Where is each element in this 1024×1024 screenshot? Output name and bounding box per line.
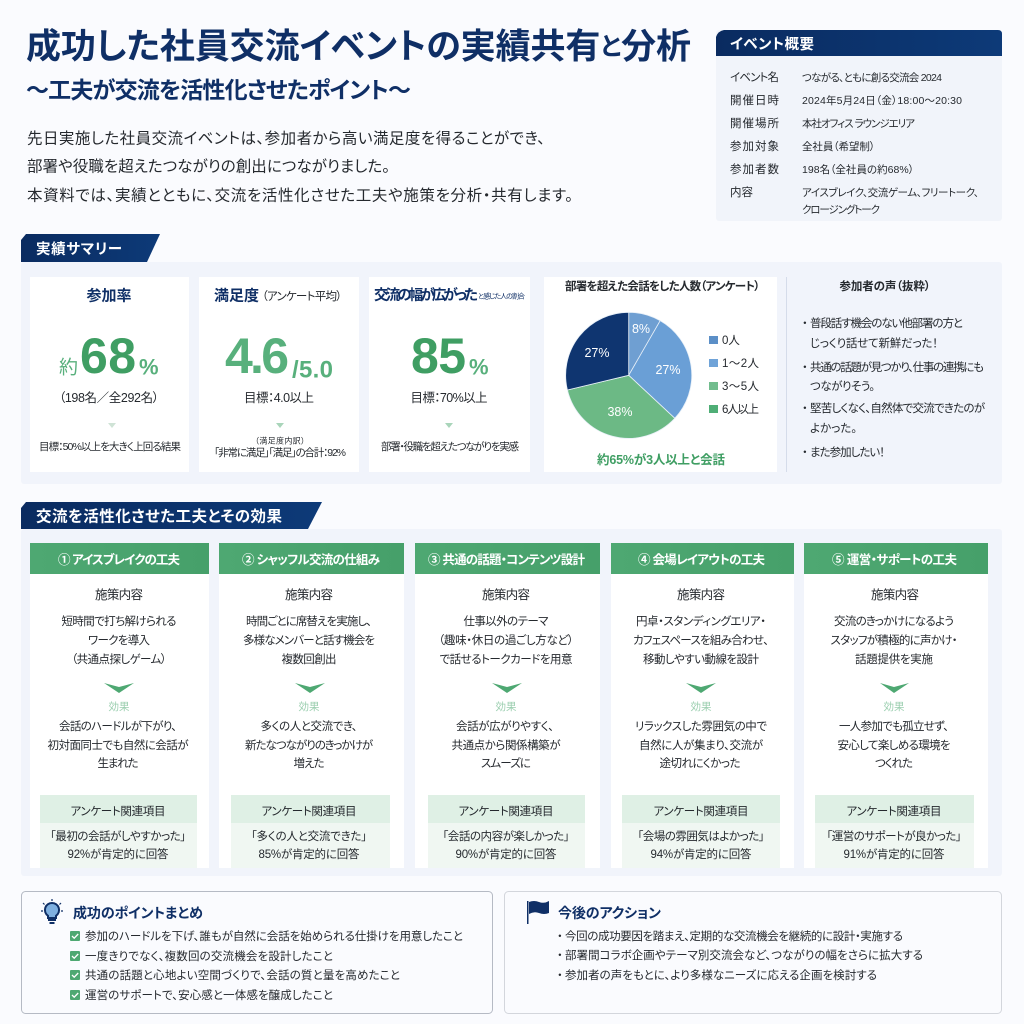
legend: 1〜2人 <box>722 357 760 370</box>
participant voices: 普段話す機会のない他部署の方と <box>810 316 963 330</box>
participant voices: 参加者の声（抜粋） <box>840 279 930 293</box>
card 5: operations and support: 91%が肯定的に回答 <box>844 847 945 861</box>
overview rows: イベント名 <box>730 70 779 84</box>
chart card: cross-department conversations <box>544 277 777 472</box>
card: satisfaction: 「非常に満足」「満足」の合計：92% <box>214 446 346 459</box>
pie labels: 8% <box>632 322 650 336</box>
card 4: venue layout: 自然に人が集まり、交流が <box>639 738 764 752</box>
overview rows: 開催場所 <box>730 116 780 130</box>
panel: event overview <box>716 30 1002 221</box>
card: participation rate: 参加率 <box>86 286 132 304</box>
card 5: operations and support: 話題提供を実施 <box>855 652 934 666</box>
panel: success points <box>22 892 492 1014</box>
overview rows: クロージングトーク <box>802 203 880 216</box>
pie labels: 38% <box>607 405 633 419</box>
pie labels: 27% <box>584 346 610 360</box>
card 1: ice break: 92%が肯定的に回答 <box>68 847 169 861</box>
participant voices: じっくり話せて新鮮だった！ <box>810 336 938 350</box>
card: participation rate: 約 <box>59 356 78 378</box>
legend <box>709 334 760 416</box>
card 5: operations and support: ⑤ 運営・サポートの工夫 <box>832 552 957 567</box>
card: breadth of exchange: と感じた人の割合 <box>478 291 525 300</box>
chart title: 部署を超えた会話をした人数（アンケート） <box>565 279 760 293</box>
pie labels: 27% <box>655 363 681 377</box>
card 2: shuffle: 複数回創出 <box>282 653 336 666</box>
overview rows: 参加対象 <box>730 140 780 153</box>
intro text: 本資料では、実績とともに、交流を活性化させた工夫や施策を分析・共有します。 <box>27 186 573 204</box>
section heading: 実績サマリー <box>36 240 122 258</box>
card 5: operations and support: 施策内容 <box>871 587 919 602</box>
pie labels <box>584 322 681 419</box>
card: satisfaction: 4.6 <box>225 328 289 384</box>
card 3: topics and content: で話せるトークカードを用意 <box>439 653 573 666</box>
pie chart <box>566 312 692 438</box>
card: satisfaction <box>199 277 359 472</box>
card 1: ice break: 施策内容 <box>95 587 143 602</box>
heading: 今後のアクション <box>558 905 662 921</box>
action list: ・ <box>557 931 563 943</box>
card 2: shuffle: 「多くの人と交流できた」 <box>251 829 367 843</box>
card 4: venue layout: 途切れにくかった <box>660 757 740 770</box>
checklist: 参加のハードルを下げ、誰もが自然に会話を始められる仕掛けを用意したこと <box>85 929 463 943</box>
card 1: ice break: 初対面同士でも自然に会話が <box>48 738 189 752</box>
card 2: shuffle: ② シャッフル交流の仕組み <box>242 552 380 567</box>
card 2: shuffle: 時間ごとに席替えを実施し、 <box>246 614 372 628</box>
participant voices <box>802 279 986 459</box>
intro text: 先日実施した社員交流イベントは、参加者から高い満足度を得ることができ、 <box>27 129 545 147</box>
overview rows: 参加者数 <box>730 163 780 176</box>
checklist <box>70 929 463 1002</box>
card 4: venue layout: 効果 <box>690 701 712 713</box>
participant voices: ・ <box>802 403 808 415</box>
card 2: shuffle <box>219 543 404 868</box>
overview rows: アイスブレイク、交流ゲーム、フリートーク、 <box>802 186 979 199</box>
overview rows <box>730 70 979 216</box>
card 5: operations and support: 「運営のサポートが良かった」 <box>826 829 962 843</box>
participant voices: また参加したい！ <box>810 446 885 459</box>
card: satisfaction: 満足度 <box>214 286 259 304</box>
card 5: operations and support: アンケート関連項目 <box>846 804 942 818</box>
card 1: ice break: ① アイスブレイクの工夫 <box>58 552 180 567</box>
card: satisfaction: （満足度内訳） <box>255 435 305 445</box>
card 4: venue layout: 94%が肯定的に回答 <box>650 847 752 861</box>
overview header <box>716 30 1002 56</box>
card 2: shuffle: 新たなつながりのきっかけが <box>245 738 374 752</box>
title: 成功した社員交流イベントの実績共有と分析 <box>26 27 691 66</box>
card 3: topics and content: 仕事以外のテーマ <box>464 615 549 628</box>
action list: 参加者の声をもとに、より多様なニーズに応える企画を検討する <box>565 968 877 982</box>
card 1: ice break <box>30 543 209 868</box>
card 4: venue layout: 移動しやすい動線を設計 <box>643 652 760 666</box>
section heading: 交流を活性化させた工夫とその効果 <box>36 506 282 525</box>
card: breadth of exchange: % <box>469 354 489 379</box>
card: participation rate: 目標：50%以上を大きく上回る結果 <box>39 440 182 453</box>
overview rows: 2024年5月24日（金）18:00〜20:30 <box>802 94 962 107</box>
card 5: operations and support <box>804 543 988 868</box>
card 3: topics and content: 効果 <box>496 701 517 713</box>
card: satisfaction: /5.0 <box>292 356 333 383</box>
card 1: ice break: （共通点探しゲーム） <box>72 652 166 666</box>
panel: next actions <box>504 892 1002 1014</box>
card 1: ice break: 短時間で打ち解けられる <box>62 614 176 628</box>
checklist: 共通の話題と心地よい空間づくりで、会話の質と量を高めたこと <box>85 968 400 982</box>
action list: 部署間コラボ企画やテーマ別交流会など、つながりの幅をさらに拡大する <box>565 948 923 962</box>
overview rows: 開催日時 <box>730 94 780 107</box>
card: participation rate: （198名／全292名） <box>59 390 159 405</box>
participant voices: 堅苦しくなく、自然体で交流できたのが <box>810 401 986 415</box>
card 1: ice break: ワークを導入 <box>88 633 150 647</box>
card 4: venue layout: ④ 会場レイアウトの工夫 <box>638 552 765 567</box>
card 1: ice break: 生まれた <box>98 756 138 770</box>
card 3: topics and content: （趣味・休日の過ごし方など） <box>438 633 574 647</box>
card: breadth of exchange: 85 <box>411 328 466 384</box>
checklist: 運営のサポートで、安心感と一体感を醸成したこと <box>85 988 333 1002</box>
action list: ・ <box>557 950 563 962</box>
card 5: operations and support: スタッフが積極的に声かけ・ <box>830 633 958 647</box>
divider <box>786 277 787 472</box>
card: participation rate: % <box>139 354 159 379</box>
card 3: topics and content: 90%が肯定的に回答 <box>456 847 557 861</box>
chart takeaway: 約65%が3人以上と会話 <box>597 452 725 467</box>
card 3: topics and content: ③ 共通の話題・コンテンツ設計 <box>428 552 585 567</box>
participant voices: 共通の話題が見つかり、仕事の連携にも <box>810 360 984 374</box>
card 1: ice break: 会話のハードルが下がり、 <box>59 719 177 733</box>
card 3: topics and content: 「会話の内容が楽しかった」 <box>442 829 570 843</box>
card: breadth of exchange <box>369 277 530 472</box>
legend: 3〜5人 <box>722 380 760 393</box>
section panel: ideas and effects <box>21 502 1002 876</box>
card 2: shuffle: 増えた <box>294 757 324 770</box>
icon: flag <box>527 901 549 924</box>
card 5: operations and support: つくれた <box>875 757 913 770</box>
participant voices: ・ <box>802 362 808 374</box>
overview rows: 内容 <box>730 185 754 199</box>
card: satisfaction: 目標：4.0以上 <box>244 391 314 405</box>
checklist: 一度きりでなく、複数回の交流機会を設計したこと <box>85 949 333 963</box>
card 1: ice break: アンケート関連項目 <box>70 804 166 818</box>
overview rows: 本社オフィス ラウンジエリア <box>802 117 915 130</box>
card 2: shuffle: 多様なメンバーと話す機会を <box>243 633 375 647</box>
subtitle: 〜工夫が交流を活性化させたポイント〜 <box>26 77 411 103</box>
card 5: operations and support: 交流のきっかけになるよう <box>834 615 954 628</box>
card 2: shuffle: 効果 <box>298 701 320 713</box>
section panel: results summary <box>21 234 1002 484</box>
card 3: topics and content: アンケート関連項目 <box>458 804 554 818</box>
overview rows: 198名（全社員の約68%） <box>802 163 914 176</box>
card 4: venue layout: アンケート関連項目 <box>654 804 748 818</box>
participant voices: よかった。 <box>810 422 857 435</box>
card 3: topics and content: スムーズに <box>481 756 531 770</box>
card: breadth of exchange: 部署・役職を超えたつながりを実感 <box>381 440 520 453</box>
card 3: topics and content <box>415 543 600 868</box>
card: participation rate <box>30 277 189 472</box>
card 2: shuffle: アンケート関連項目 <box>262 804 356 818</box>
participant voices: ・ <box>802 318 808 330</box>
heading: 成功のポイントまとめ <box>73 905 203 921</box>
card 3: topics and content: 施策内容 <box>482 587 530 602</box>
card: breadth of exchange: 交流の幅が広がった <box>374 286 478 304</box>
action list: 今回の成功要因を踏まえ、定期的な交流機会を継続的に設計・実施する <box>565 929 903 943</box>
intro text: 部署や役職を超えたつながりの創出につながりました。 <box>27 157 390 175</box>
card 5: operations and support: 効果 <box>884 701 905 713</box>
section banner <box>21 502 322 529</box>
card 2: shuffle: 多くの人と交流でき、 <box>260 719 358 733</box>
intro text <box>27 129 573 204</box>
legend: 0人 <box>722 334 740 347</box>
card 2: shuffle: 施策内容 <box>285 587 333 602</box>
overview heading: イベント概要 <box>730 36 814 53</box>
card 4: venue layout: リラックスした雰囲気の中で <box>635 719 767 733</box>
action list <box>557 929 923 982</box>
action list: ・ <box>557 970 563 982</box>
card 4: venue layout: 「会場の雰囲気はよかった」 <box>638 829 764 843</box>
section banner <box>21 234 160 262</box>
card 4: venue layout: 施策内容 <box>677 587 725 602</box>
card 2: shuffle: 85%が肯定的に回答 <box>258 847 360 861</box>
card 4: venue layout: 円卓・スタンディングエリア・ <box>636 614 766 628</box>
icon: light bulb <box>41 899 63 924</box>
card 1: ice break: 効果 <box>108 701 130 713</box>
card 1: ice break: 「最初の会話がしやすかった」 <box>50 829 186 843</box>
overview rows: つながる、ともに創る交流会 2024 <box>802 71 942 84</box>
card 4: venue layout: カフェスペースを組み合わせ、 <box>633 634 769 647</box>
participant voices: つながりそう。 <box>810 379 875 393</box>
card: satisfaction: （アンケート平均） <box>262 289 342 303</box>
overview rows: 全社員（希望制） <box>802 140 875 153</box>
card 4: venue layout <box>611 543 794 868</box>
card 5: operations and support: 安心して楽しめる環境を <box>838 739 951 752</box>
legend: 6人以上 <box>722 403 759 416</box>
card: participation rate: 68 <box>80 328 136 384</box>
participant voices: ・ <box>802 447 808 459</box>
card 3: topics and content: 会話が広がりやすく、 <box>456 719 554 733</box>
card: breadth of exchange: 目標：70%以上 <box>410 391 488 405</box>
card 3: topics and content: 共通点から関係構築が <box>452 738 561 752</box>
card 5: operations and support: 一人参加でも孤立せず、 <box>839 719 949 733</box>
